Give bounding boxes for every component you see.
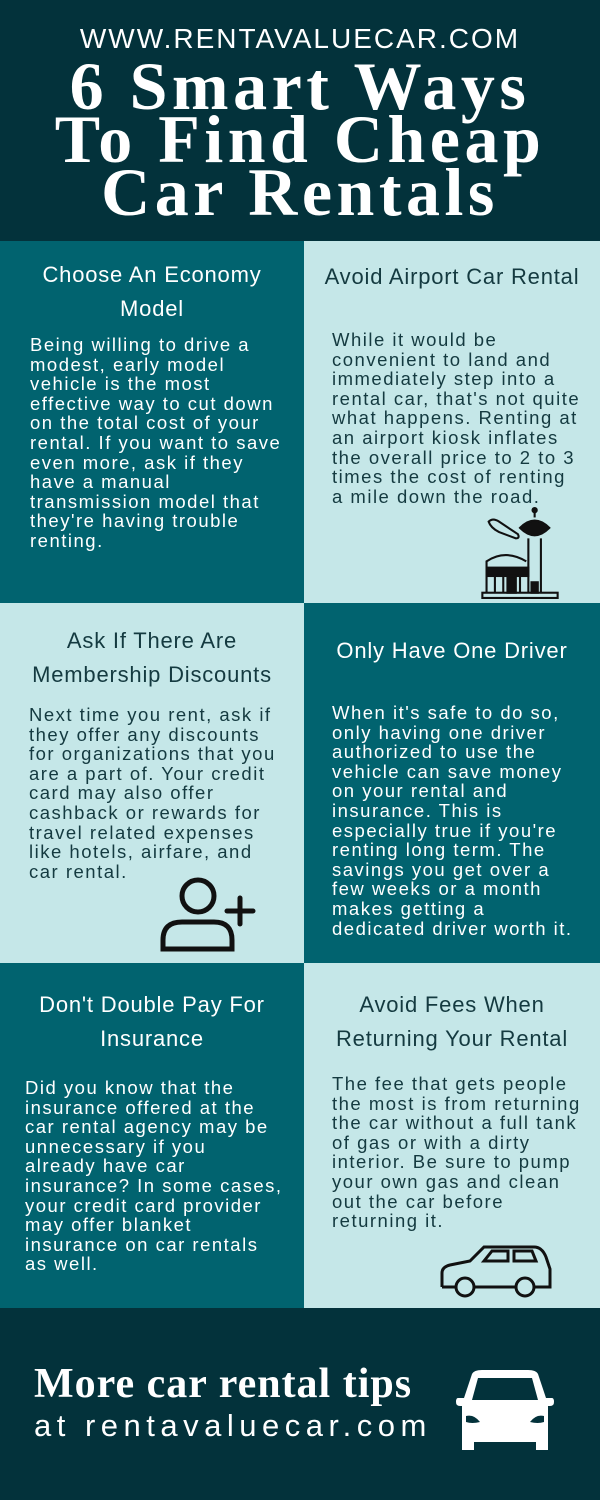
icon: add user bbox=[160, 878, 256, 952]
text: a mile down the road. bbox=[332, 486, 540, 507]
text bbox=[332, 702, 573, 939]
panel: one driver bbox=[304, 603, 600, 963]
heading: Only Have One Driver bbox=[336, 638, 568, 663]
text: times the cost of renting bbox=[332, 466, 566, 487]
text: Next time you rent, ask if bbox=[29, 704, 272, 725]
heading bbox=[32, 628, 272, 687]
text: Did you know that the bbox=[25, 1077, 234, 1098]
footer heading: More car rental tips bbox=[34, 1361, 412, 1407]
text: like hotels, airfare, and bbox=[29, 841, 253, 862]
icon: car bbox=[440, 1246, 552, 1298]
heading: Don't Double Pay For bbox=[39, 992, 265, 1017]
heading: Model bbox=[120, 296, 184, 321]
text: car rental agency may be bbox=[25, 1116, 269, 1137]
text: makes getting a bbox=[332, 898, 485, 919]
heading: Choose An Economy bbox=[42, 262, 262, 287]
icon: car front bbox=[456, 1370, 554, 1450]
heading: Membership Discounts bbox=[32, 662, 272, 687]
text: insurance offered at the bbox=[25, 1097, 255, 1118]
text: even more, ask if they bbox=[30, 452, 244, 473]
heading: Returning Your Rental bbox=[336, 1026, 568, 1051]
text: The fee that gets people bbox=[332, 1073, 568, 1094]
text: renting. bbox=[30, 530, 104, 551]
text: especially true if you're bbox=[332, 820, 557, 841]
heading: Ask If There Are bbox=[67, 628, 237, 653]
text: travel related expenses bbox=[29, 822, 255, 843]
text: dedicated driver worth it. bbox=[332, 918, 573, 939]
panel: return fees bbox=[304, 963, 600, 1308]
text: they're having trouble bbox=[30, 510, 239, 531]
text: insurance on car rentals bbox=[25, 1234, 258, 1255]
text: immediately step into a bbox=[332, 368, 556, 389]
heading: Avoid Airport Car Rental bbox=[325, 264, 579, 289]
text: rental car, that's not quite bbox=[332, 388, 580, 409]
title: Car Rentals bbox=[101, 154, 499, 230]
text: out the car before bbox=[332, 1191, 504, 1212]
heading: Avoid Fees When bbox=[359, 992, 545, 1017]
text bbox=[29, 704, 276, 882]
text: the overall price to 2 to 3 bbox=[332, 447, 575, 468]
icon: airport bbox=[481, 507, 559, 599]
text: they offer any discounts bbox=[29, 724, 260, 745]
title: 6 Smart Ways bbox=[70, 48, 530, 124]
panel: economy model bbox=[0, 241, 304, 603]
text bbox=[25, 1077, 283, 1274]
text: what happens. Renting at bbox=[332, 407, 578, 428]
text: rental. If you want to save bbox=[30, 432, 281, 453]
text: interior. Be sure to pump bbox=[332, 1151, 571, 1172]
text: When it's safe to do so, bbox=[332, 702, 560, 723]
text: While it would be bbox=[332, 329, 497, 350]
panel: insurance bbox=[0, 963, 304, 1308]
heading bbox=[336, 992, 568, 1051]
text bbox=[332, 329, 580, 507]
text: returning it. bbox=[332, 1210, 444, 1231]
title bbox=[55, 48, 545, 230]
text: cashback or rewards for bbox=[29, 802, 261, 823]
text: convenient to land and bbox=[332, 349, 551, 370]
text: your credit card provider bbox=[25, 1195, 262, 1216]
footer url: at rentavaluecar.com bbox=[34, 1408, 432, 1443]
text: effective way to cut down bbox=[30, 393, 274, 414]
text bbox=[332, 1073, 581, 1231]
header bbox=[0, 0, 600, 241]
text: modest, early model bbox=[30, 354, 225, 375]
text: an airport kiosk inflates bbox=[332, 427, 559, 448]
heading bbox=[39, 992, 265, 1051]
footer bbox=[0, 1308, 600, 1500]
text: transmission model that bbox=[30, 491, 260, 512]
text: your own gas and clean bbox=[332, 1171, 560, 1192]
text: insurance. This is bbox=[332, 800, 503, 821]
text: only having one driver bbox=[332, 722, 546, 743]
text bbox=[30, 334, 281, 551]
text: may offer blanket bbox=[25, 1214, 192, 1235]
heading bbox=[42, 262, 262, 321]
text: card may also offer bbox=[29, 782, 214, 803]
text: are a part of. Your credit bbox=[29, 763, 265, 784]
text: the car without a full tank bbox=[332, 1112, 577, 1133]
text: for organizations that you bbox=[29, 743, 276, 764]
text: as well. bbox=[25, 1253, 99, 1274]
text: the most is from returning bbox=[332, 1093, 581, 1114]
panel: membership bbox=[0, 603, 304, 963]
panel: airport bbox=[304, 241, 600, 603]
text: few weeks or a month bbox=[332, 878, 542, 899]
text: renting long term. The bbox=[332, 839, 546, 860]
text: have a manual bbox=[30, 471, 171, 492]
text: savings you get over a bbox=[332, 859, 550, 880]
text: already have car bbox=[25, 1155, 186, 1176]
text: Being willing to drive a bbox=[30, 334, 250, 355]
text: vehicle can save money bbox=[332, 761, 562, 782]
text: vehicle is the most bbox=[30, 373, 211, 394]
title: To Find Cheap bbox=[55, 101, 545, 177]
text: authorized to use the bbox=[332, 741, 536, 762]
text: of gas or with a dirty bbox=[332, 1132, 531, 1153]
text: insurance? In some cases, bbox=[25, 1175, 283, 1196]
text: car rental. bbox=[29, 861, 128, 882]
website url: WWW.RENTAVALUECAR.COM bbox=[80, 23, 520, 54]
heading: Insurance bbox=[100, 1026, 204, 1051]
text: unnecessary if you bbox=[25, 1136, 206, 1157]
text: on your rental and bbox=[332, 780, 508, 801]
text: on the total cost of your bbox=[30, 412, 260, 433]
